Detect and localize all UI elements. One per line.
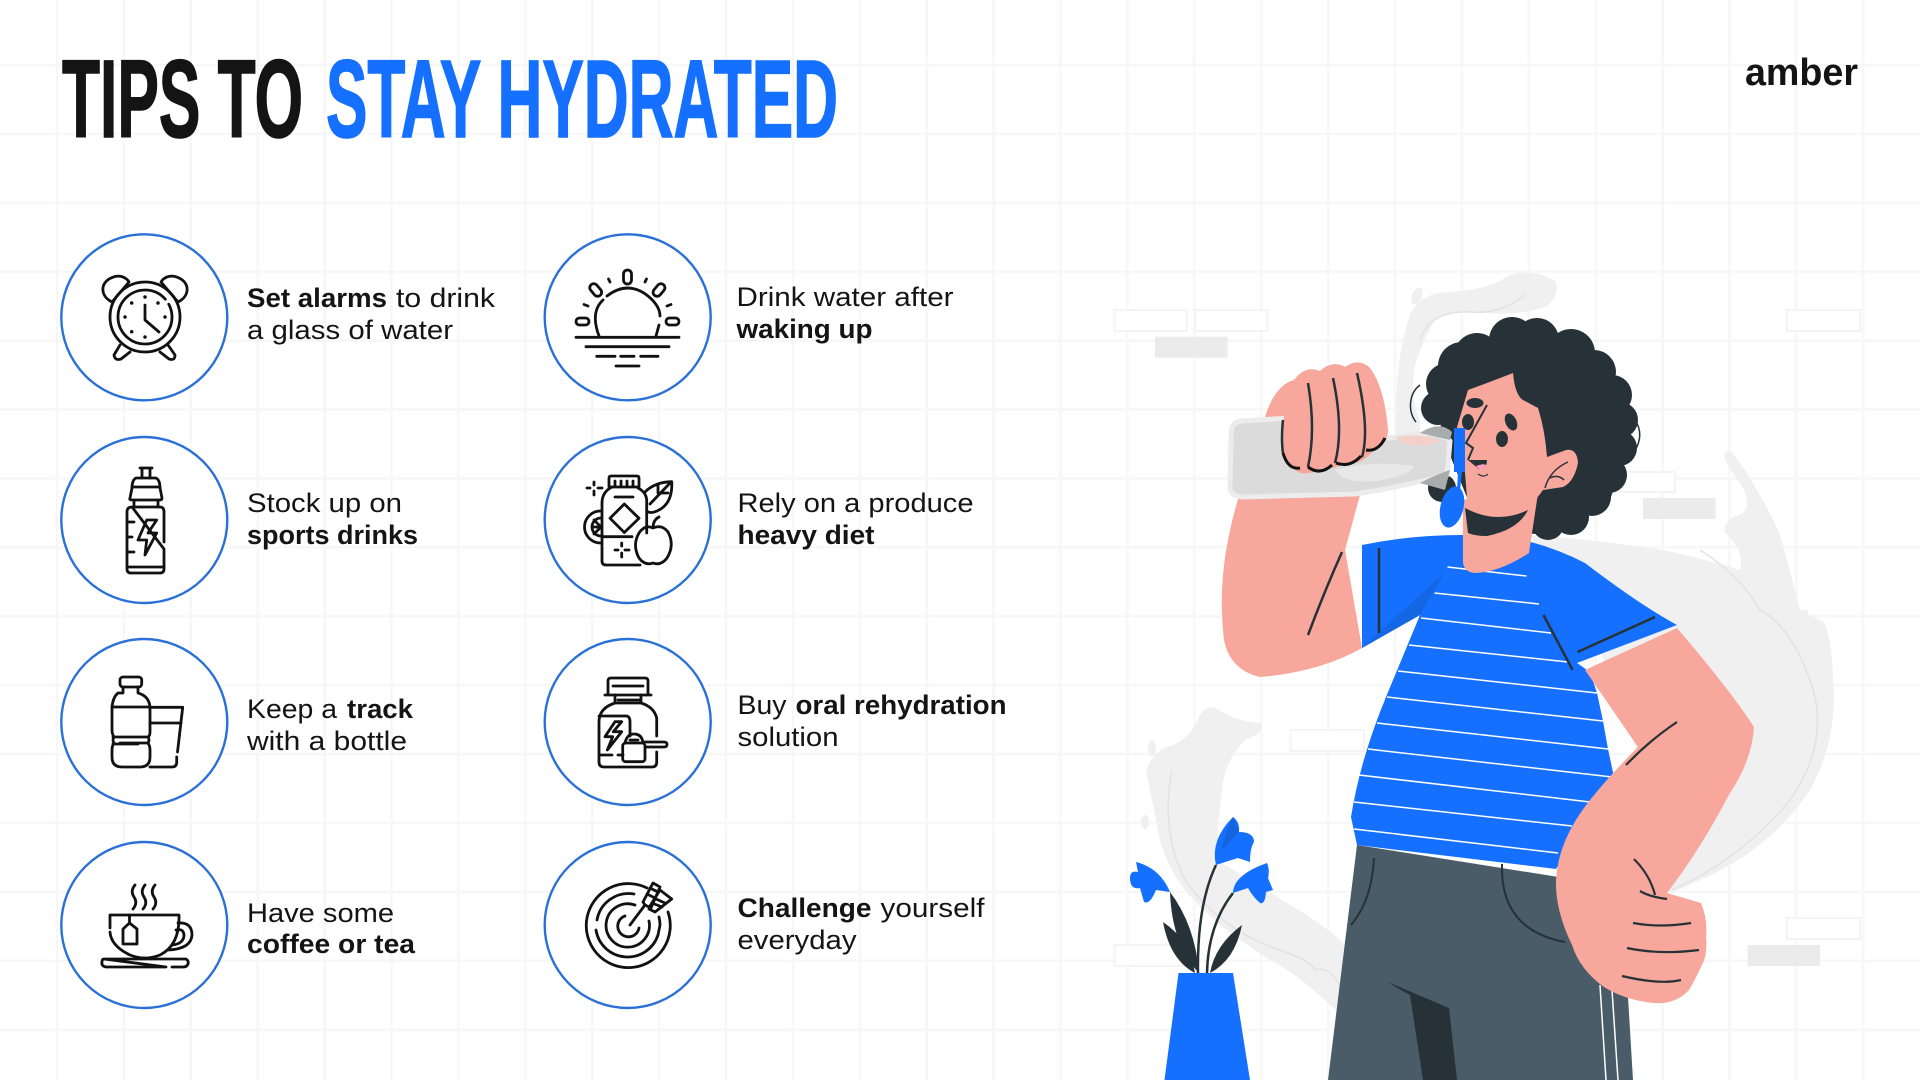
- tip text: Keep a: [247, 694, 338, 724]
- icon: tea cup: [102, 885, 192, 967]
- icon: jar with fruit: [585, 476, 672, 565]
- icon: alarm clock: [103, 276, 187, 360]
- tip text: to drink: [396, 283, 496, 313]
- icon: sports bottle: [127, 468, 164, 573]
- icon: bottle and glass: [112, 677, 183, 767]
- title: STAY HYDRATED: [326, 38, 838, 161]
- tip text: [738, 893, 985, 955]
- tip text: Stock up on: [247, 488, 402, 518]
- illustration: person drinking water: [1114, 273, 1860, 1080]
- icon: powder jar with scoop: [599, 678, 667, 767]
- hair: [1410, 317, 1640, 540]
- tip text: Challenge: [738, 893, 872, 923]
- tip text: solution: [738, 722, 838, 752]
- background bricks: [1114, 310, 1860, 966]
- gripping fingers: [1282, 362, 1388, 474]
- tip text: [247, 898, 416, 959]
- tip text: a glass of water: [247, 315, 453, 345]
- tip text: [247, 488, 418, 550]
- tip text: yourself: [880, 893, 985, 923]
- logo: amber: amber: [1745, 52, 1858, 94]
- neck: [1463, 480, 1540, 573]
- tip: oral rehydration: [545, 639, 1006, 805]
- tip text: [247, 283, 496, 345]
- tip: coffee or tea: [61, 842, 416, 1008]
- tip text: Rely on a produce: [738, 488, 974, 518]
- tip text: Set alarms: [247, 283, 387, 313]
- tip text: sports drinks: [247, 520, 418, 550]
- tip text: Drink water after: [736, 282, 954, 312]
- icon: sunrise: [576, 270, 679, 366]
- water bottle: [1230, 418, 1452, 497]
- tip text: waking up: [735, 314, 872, 344]
- tip text: [738, 690, 1006, 752]
- arm on hip: [1308, 552, 1754, 1003]
- tip text: oral rehydration: [796, 690, 1006, 720]
- tip text: [738, 488, 974, 550]
- flower vase: [1130, 817, 1273, 1080]
- tip text: [246, 694, 414, 756]
- tip text: coffee or tea: [247, 929, 416, 959]
- tip: waking up: [545, 234, 954, 400]
- tip text: everyday: [738, 925, 857, 955]
- tip: produce heavy diet: [545, 437, 974, 603]
- tip: sports drinks: [61, 437, 418, 603]
- tip text: track: [347, 694, 414, 724]
- splash highlights: [1168, 295, 1818, 990]
- tip text: heavy diet: [738, 520, 875, 550]
- pants details: [1351, 858, 1618, 1080]
- tip text: Buy: [738, 690, 787, 720]
- title: TIPS TO: [62, 38, 303, 161]
- face: [1457, 373, 1578, 536]
- tip text: [735, 282, 954, 344]
- title: [62, 38, 838, 161]
- pants: [1328, 845, 1640, 1080]
- water splash: [1141, 273, 1834, 1016]
- raised arm: [1222, 362, 1388, 677]
- tip text: with a bottle: [246, 726, 407, 756]
- icon: target with arrow: [586, 883, 672, 968]
- tip text: Have some: [247, 898, 394, 928]
- blue spoon: [1436, 428, 1468, 530]
- tip: track with a bottle: [61, 639, 414, 805]
- tip: set alarms: [61, 234, 496, 400]
- striped shirt: [1351, 535, 1677, 869]
- tip: challenge: [545, 842, 985, 1008]
